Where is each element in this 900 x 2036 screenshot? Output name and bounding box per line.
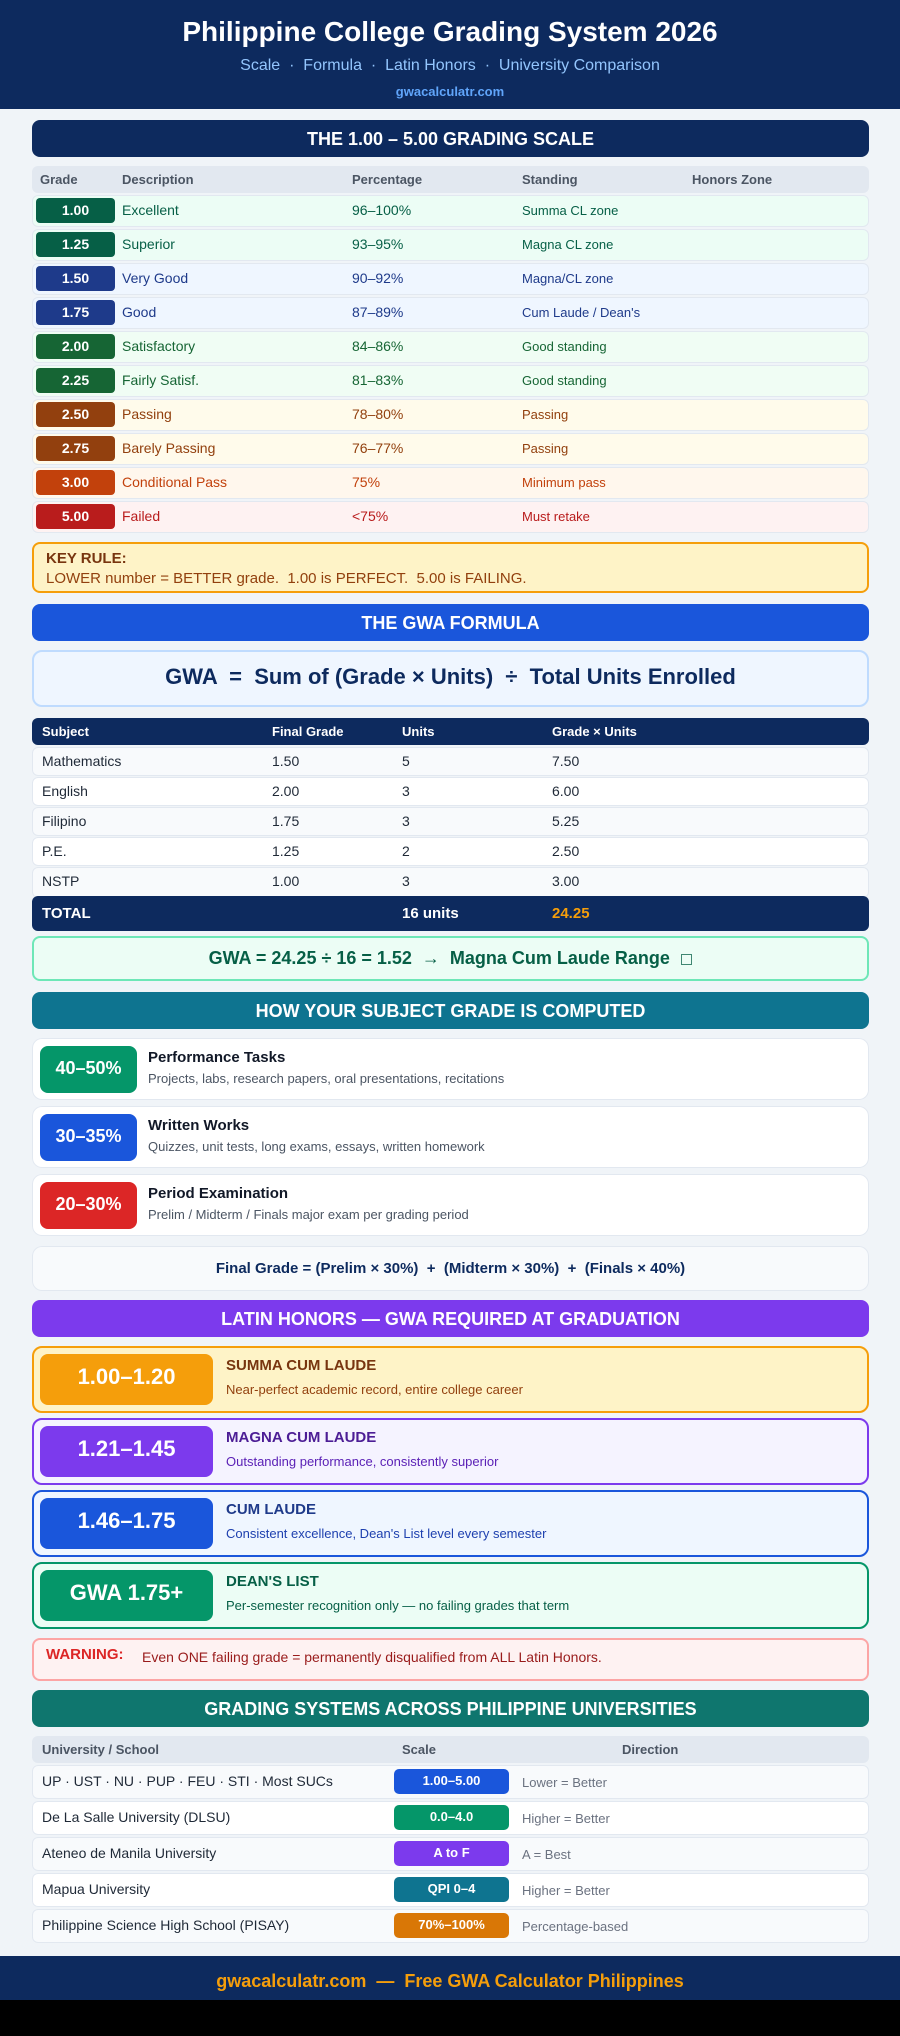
panel: period examination — [32, 1174, 869, 1236]
table header: Subject — [42, 724, 89, 739]
row Ateneo: A = Best — [522, 1847, 571, 1862]
honor title: MAGNA CUM LAUDE — [226, 1429, 376, 1446]
row 1.50: 90–92% — [352, 270, 403, 286]
footer: gwacalculatr.com — Free GWA Calculator Philippines — [216, 1971, 684, 1991]
row english: 3 — [402, 783, 410, 799]
row 2.50: Passing — [122, 406, 172, 422]
row P.E.: 2 — [402, 843, 410, 859]
row 5.00: <75% — [352, 508, 388, 524]
table header: Honors Zone — [692, 172, 772, 187]
GWA range badge: GWA 1.75+ — [70, 1580, 183, 1605]
heading: grading scale — [32, 120, 869, 157]
table header — [32, 1736, 869, 1763]
row UP group: UP · UST · NU · PUP · FEU · STI · Most SUCs — [42, 1773, 333, 1789]
row 2.00: Satisfactory — [122, 338, 195, 354]
formula box — [32, 650, 869, 707]
row 2.00 — [32, 331, 869, 363]
row english: 6.00 — [552, 783, 579, 799]
card title: Period Examination — [148, 1185, 288, 1202]
row 1.25: Magna CL zone — [522, 237, 613, 252]
row filipino: 3 — [402, 813, 410, 829]
row NSTP: 1.00 — [272, 873, 299, 889]
row 2.25: 81–83% — [352, 372, 403, 388]
table header — [32, 166, 869, 193]
row 2.50: 78–80% — [352, 406, 403, 422]
row 2.75: 76–77% — [352, 440, 403, 456]
footer — [0, 1956, 900, 2000]
row 3.00 — [32, 467, 869, 499]
row filipino: 5.25 — [552, 813, 579, 829]
table header: Description — [122, 172, 194, 187]
heading: grading scale: THE 1.00 – 5.00 GRADING SCALE — [307, 129, 594, 149]
honor title: CUM LAUDE — [226, 1501, 316, 1518]
heading: subject grade: HOW YOUR SUBJECT GRADE IS COMPUTED — [256, 1001, 645, 1021]
row 1.75: Good — [122, 304, 156, 320]
weight badge: 40–50% — [55, 1058, 122, 1078]
row filipino — [32, 807, 869, 836]
row Ateneo — [32, 1837, 869, 1871]
row DLSU: 0.0–4.0 — [430, 1809, 473, 1824]
row 5.00: 5.00 — [62, 508, 89, 524]
row 2.25: Good standing — [522, 373, 607, 388]
row 1.75: 1.75 — [62, 304, 89, 320]
row english: 2.00 — [272, 783, 299, 799]
honor description: Consistent excellence, Dean's List level every semester — [226, 1526, 546, 1541]
row UP group — [32, 1765, 869, 1799]
row 1.00: Summa CL zone — [522, 203, 618, 218]
row mathematics — [32, 747, 869, 776]
GWA result box: GWA = 24.25 ÷ 16 = 1.52 → Magna Cum Laude Range — [209, 948, 670, 968]
row 1.75: 87–89% — [352, 304, 403, 320]
row P.E.: 1.25 — [272, 843, 299, 859]
row mathematics: 5 — [402, 753, 410, 769]
row Mapua: QPI 0–4 — [428, 1881, 475, 1896]
row mathematics: Mathematics — [42, 753, 121, 769]
card description: Prelim / Midterm / Finals major exam per grading period — [148, 1207, 469, 1222]
row 2.25: 2.25 — [62, 372, 89, 388]
row filipino: Filipino — [42, 813, 86, 829]
row 2.00: 84–86% — [352, 338, 403, 354]
row PISAY: Percentage-based — [522, 1919, 628, 1934]
callout: warning — [32, 1638, 869, 1681]
row UP group: 1.00–5.00 — [423, 1773, 480, 1788]
row 1.50: 1.50 — [62, 270, 89, 286]
row 2.50: Passing — [522, 407, 568, 422]
row PISAY — [32, 1909, 869, 1943]
final grade formula: Final Grade = (Prelim × 30%) + (Midterm × 30%) + (Finals × 40%) — [216, 1260, 685, 1277]
row mathematics: 7.50 — [552, 753, 579, 769]
row 1.25: 1.25 — [62, 236, 89, 252]
honor title: SUMMA CUM LAUDE — [226, 1357, 376, 1374]
total row: 16 units — [402, 905, 459, 922]
table header: Grade — [40, 172, 78, 187]
row 2.25 — [32, 365, 869, 397]
grading scale table — [32, 166, 869, 533]
weight badge: 20–30% — [55, 1194, 122, 1214]
panel: performance tasks — [32, 1038, 869, 1100]
table header: University / School — [42, 1742, 159, 1757]
weight badge — [40, 1182, 137, 1229]
honor title: DEAN'S LIST — [226, 1573, 319, 1590]
row 3.00: Conditional Pass — [122, 474, 227, 490]
honor description: Outstanding performance, consistently superior — [226, 1454, 498, 1469]
card title: Written Works — [148, 1117, 249, 1134]
formula box: GWA = Sum of (Grade × Units) ÷ Total Units Enrolled — [165, 664, 736, 689]
GWA range badge — [40, 1354, 213, 1405]
row 1.00: 96–100% — [352, 202, 411, 218]
heading: subject grade — [32, 992, 869, 1029]
row 2.75 — [32, 433, 869, 465]
heading: latin honors — [32, 1300, 869, 1337]
row 1.75 — [32, 297, 869, 329]
row english: English — [42, 783, 88, 799]
site url: gwacalculatr.com — [396, 84, 504, 99]
row DLSU — [32, 1801, 869, 1835]
row 2.00: 2.00 — [62, 338, 89, 354]
row NSTP — [32, 867, 869, 898]
row 1.50: Very Good — [122, 270, 188, 286]
GWA range badge — [40, 1498, 213, 1549]
row PISAY: Philippine Science High School (PISAY) — [42, 1917, 289, 1933]
row DLSU: Higher = Better — [522, 1811, 610, 1826]
table header: Grade × Units — [552, 724, 637, 739]
row DLSU: De La Salle University (DLSU) — [42, 1809, 230, 1825]
weight badge — [40, 1114, 137, 1161]
panel: summa cum laude — [32, 1346, 869, 1413]
row NSTP: NSTP — [42, 873, 79, 889]
key rule text: LOWER number = BETTER grade. 1.00 is PERFECT. 5.00 is FAILING. — [46, 570, 527, 587]
heading: GWA formula — [32, 604, 869, 641]
heading: university systems — [32, 1690, 869, 1727]
row 2.75: 2.75 — [62, 440, 89, 456]
row NSTP: 3 — [402, 873, 410, 889]
row 3.00: Minimum pass — [522, 475, 606, 490]
row 5.00: Failed — [122, 508, 160, 524]
row 1.00 — [32, 195, 869, 227]
table header: Final Grade — [272, 724, 344, 739]
row 1.50: Magna/CL zone — [522, 271, 613, 286]
card description: Quizzes, unit tests, long exams, essays, written homework — [148, 1139, 485, 1154]
GWA sample table — [32, 718, 869, 931]
row 2.50 — [32, 399, 869, 431]
GWA range badge: 1.46–1.75 — [78, 1508, 175, 1533]
row Ateneo: A to F — [433, 1845, 470, 1860]
table header — [32, 718, 869, 745]
row 3.00: 75% — [352, 474, 380, 490]
row Ateneo: Ateneo de Manila University — [42, 1845, 216, 1861]
row PISAY: 70%–100% — [418, 1917, 485, 1932]
row 1.00: Excellent — [122, 202, 179, 218]
row NSTP: 3.00 — [552, 873, 579, 889]
row english — [32, 777, 869, 806]
heading: university systems: GRADING SYSTEMS ACROSS PHILIPPINE UNIVERSITIES — [204, 1699, 697, 1719]
key rule label: KEY RULE: — [46, 550, 127, 567]
total row — [32, 896, 869, 931]
heading: GWA formula: THE GWA FORMULA — [361, 613, 540, 633]
row Mapua — [32, 1873, 869, 1907]
table header: Standing — [522, 172, 578, 187]
row filipino: 1.75 — [272, 813, 299, 829]
subtitle: Scale · Formula · Latin Honors · University Comparison — [240, 57, 660, 74]
callout: key rule — [32, 542, 869, 593]
total row: TOTAL — [42, 905, 91, 922]
header banner — [0, 0, 900, 109]
row 1.25 — [32, 229, 869, 261]
row 2.00: Good standing — [522, 339, 607, 354]
row P.E.: 2.50 — [552, 843, 579, 859]
GWA range badge: 1.21–1.45 — [78, 1436, 175, 1461]
GWA result box — [32, 936, 869, 981]
honor description: Per-semester recognition only — no failing grades that term — [226, 1598, 569, 1613]
row Mapua: Higher = Better — [522, 1883, 610, 1898]
GWA range badge: 1.00–1.20 — [78, 1364, 175, 1389]
row 2.75: Barely Passing — [122, 440, 215, 456]
row 2.25: Fairly Satisf. — [122, 372, 199, 388]
panel: written works — [32, 1106, 869, 1168]
row Mapua: Mapua University — [42, 1881, 150, 1897]
heading: latin honors: LATIN HONORS — GWA REQUIRED AT GRADUATION — [221, 1309, 680, 1329]
final grade formula — [32, 1246, 869, 1291]
warning label: WARNING: — [46, 1646, 124, 1663]
row P.E.: P.E. — [42, 843, 67, 859]
table header: Direction — [622, 1742, 678, 1757]
weight badge: 30–35% — [55, 1126, 122, 1146]
row 1.25: 93–95% — [352, 236, 403, 252]
title: Philippine College Grading System 2026 — [182, 16, 718, 47]
row UP group: Lower = Better — [522, 1775, 607, 1790]
GWA range badge — [40, 1426, 213, 1477]
row 2.75: Passing — [522, 441, 568, 456]
row P.E. — [32, 837, 869, 866]
table header: Scale — [402, 1742, 436, 1757]
table header: Percentage — [352, 172, 422, 187]
warning text: Even ONE failing grade = permanently disqualified from ALL Latin Honors. — [142, 1649, 602, 1665]
panel: cum laude — [32, 1490, 869, 1557]
card description: Projects, labs, research papers, oral presentations, recitations — [148, 1071, 504, 1086]
row 1.75: Cum Laude / Dean's — [522, 305, 640, 320]
row 1.50 — [32, 263, 869, 295]
card title: Performance Tasks — [148, 1049, 285, 1066]
row 5.00 — [32, 501, 869, 533]
panel: magna cum laude — [32, 1418, 869, 1485]
row 2.50: 2.50 — [62, 406, 89, 422]
panel: dean's list — [32, 1562, 869, 1629]
row 3.00: 3.00 — [62, 474, 89, 490]
GWA range badge — [40, 1570, 213, 1621]
weight badge — [40, 1046, 137, 1093]
total row: 24.25 — [552, 905, 590, 922]
row 1.00: 1.00 — [62, 202, 89, 218]
row 5.00: Must retake — [522, 509, 590, 524]
table header: Units — [402, 724, 434, 739]
honor description: Near-perfect academic record, entire college career — [226, 1382, 523, 1397]
row 1.25: Superior — [122, 236, 175, 252]
row mathematics: 1.50 — [272, 753, 299, 769]
